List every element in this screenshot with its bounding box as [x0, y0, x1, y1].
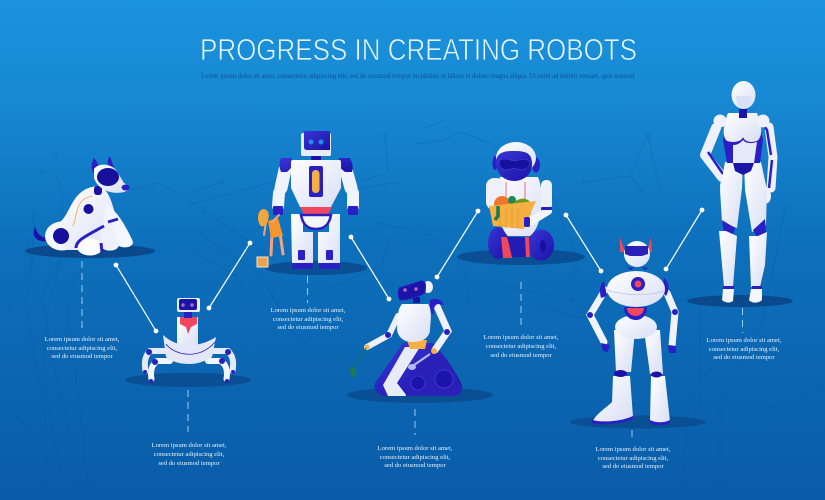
tank left arm [367, 316, 398, 347]
dashed line: android [742, 308, 744, 333]
dashed line: horned robot [631, 430, 633, 441]
caption: basket robot: consectetur adipiscing elit, [486, 343, 557, 350]
caption: horned robot: Lorem ipsum dolor sit amet, [596, 446, 671, 453]
subtitle: Lorem ipsum dolor sit amet, consectetur adipiscing elit, sed do eiusmod tempor incididunt ut labore et dolore magna aliqua. Ut enim ad minim veniam, quis nostrud [201, 72, 634, 80]
android head [732, 81, 756, 109]
circuit pattern [0, 120, 825, 500]
horned horns [620, 237, 652, 252]
horned head [624, 241, 650, 267]
basket robot red panels [501, 237, 530, 258]
caption: crab: sed do eiusmod tempor [158, 460, 220, 467]
basket robot shoulder left [486, 178, 504, 210]
crab shadow [125, 373, 251, 387]
basket robot dome [496, 142, 536, 174]
humanoid chest light [312, 170, 320, 193]
basket straps [506, 182, 525, 205]
crab legs [145, 351, 233, 379]
dashed line: dog [81, 261, 83, 331]
basket robot ears [532, 158, 540, 172]
android shoulders [714, 114, 726, 128]
caption: horned robot: sed do eiusmod tempor [602, 463, 664, 470]
connector: horned robot to android [664, 208, 704, 271]
crab red collar [180, 317, 197, 334]
horned left leg [614, 330, 635, 372]
tank eyes [403, 288, 407, 292]
tank torso [397, 304, 431, 342]
girl arm [264, 215, 279, 235]
caption: dog: sed do eiusmod tempor [51, 353, 113, 360]
dog shadow [25, 244, 155, 258]
title: PROGRESS IN CREATING ROBOTS [200, 32, 637, 67]
humanoid feet [292, 263, 313, 269]
caption: basket robot: sed do eiusmod tempor [490, 352, 552, 359]
basket robot skirt [500, 237, 530, 257]
tank hands [364, 344, 370, 350]
humanoid hands [273, 206, 283, 215]
toy box [257, 257, 268, 267]
crab visor [179, 299, 197, 310]
android feet [723, 286, 734, 289]
robot with basket [457, 142, 585, 265]
horned neck [627, 267, 648, 270]
caption: horned robot: consectetur adipiscing elit, [598, 455, 669, 462]
android right arm [769, 127, 773, 188]
robot horned [570, 237, 706, 428]
caption: humanoid: Lorem ipsum dolor sit amet, [271, 307, 346, 314]
crab column [177, 317, 198, 347]
tank spoon [414, 354, 430, 365]
humanoid face [304, 131, 330, 150]
caption: dog: consectetur adipiscing elit, [47, 345, 118, 352]
android left arm [705, 128, 722, 177]
basket robot wheels [488, 227, 508, 259]
android chest [723, 113, 763, 163]
tank wheels [411, 376, 425, 390]
robot tank [347, 281, 493, 403]
android left forearm stripe [708, 152, 723, 174]
dog collar wire [72, 196, 92, 226]
horned waist [624, 307, 647, 320]
horned arms [590, 290, 675, 346]
android neck [739, 109, 747, 118]
android bust [724, 113, 761, 142]
tank right arm [435, 304, 448, 350]
robot crab [125, 298, 251, 387]
caption: basket robot: Lorem ipsum dolor sit amet, [484, 334, 559, 341]
crab neck [184, 311, 192, 318]
tank neck [413, 297, 420, 303]
dog ears [92, 156, 114, 175]
girl legs [271, 233, 283, 255]
robot humanoid with girl [257, 131, 367, 275]
tank side panel [405, 352, 462, 396]
caption: tank: Lorem ipsum dolor sit amet, [378, 445, 453, 452]
android thighs [720, 162, 743, 228]
caption: tank: sed do eiusmod tempor [384, 462, 446, 469]
connector: basket robot to horned robot [564, 213, 603, 273]
green sock [495, 206, 498, 220]
connector: tank to basket robot [435, 209, 480, 279]
dog front leg [103, 205, 133, 247]
humanoid neck [311, 155, 321, 160]
basket robot forearm [530, 211, 548, 222]
tank shoulder [430, 299, 444, 315]
horned hands [601, 343, 676, 353]
horned pelvis [615, 315, 657, 339]
connector: crab to humanoid [207, 241, 252, 310]
humanoid head [301, 133, 331, 156]
tank white strip [383, 347, 420, 396]
android hips [733, 163, 754, 175]
horned shoulders [600, 278, 668, 298]
android calves [719, 231, 737, 287]
horned left boot [593, 376, 633, 422]
caption: android: consectetur adipiscing elit, [709, 346, 780, 353]
crab shell line [166, 342, 215, 354]
horned right boot [650, 376, 670, 424]
humanoid torso [291, 160, 341, 207]
humanoid legs [291, 214, 313, 263]
horned shadow [570, 416, 706, 428]
horned soles [592, 416, 670, 425]
basket robot cuff [541, 207, 552, 210]
humanoid shoulders [280, 158, 353, 172]
humanoid knees [298, 250, 305, 260]
basket robot visor [499, 159, 530, 170]
dog nose [122, 184, 130, 190]
caption: android: Lorem ipsum dolor sit amet, [707, 337, 782, 344]
dashed line: humanoid [306, 276, 308, 303]
caption: dog: Lorem ipsum dolor sit amet, [45, 336, 120, 343]
android midriff [733, 140, 757, 163]
dog head [94, 165, 128, 193]
horned elbows [587, 312, 593, 318]
horned torso seam [607, 290, 664, 295]
dog neck [94, 186, 102, 195]
android shadow [687, 295, 793, 307]
caption: crab: Lorem ipsum dolor sit amet, [152, 442, 227, 449]
girl hair [258, 209, 269, 226]
basket robot helmet [496, 151, 532, 181]
crab shell [163, 335, 216, 364]
dog tail [34, 228, 46, 241]
dog body [58, 187, 122, 250]
humanoid pelvis [301, 215, 331, 229]
dashed line: basket robot [520, 282, 522, 328]
horned right leg [644, 330, 663, 374]
dog visor [97, 168, 119, 186]
humanoid chest slot [309, 166, 323, 197]
robot dog [25, 156, 155, 258]
dog spots [84, 204, 94, 214]
dog rear foot [77, 238, 103, 256]
humanoid red belt [300, 207, 332, 214]
basket slats [500, 208, 518, 228]
humanoid shadow [265, 261, 367, 275]
crab eyes [181, 303, 185, 307]
tank ear [423, 281, 433, 293]
horned waist red [627, 308, 644, 316]
green tool [353, 348, 366, 368]
vegetables [494, 196, 510, 212]
android hands [720, 179, 730, 193]
crab joints [143, 349, 235, 383]
caption: crab: consectetur adipiscing elit, [154, 451, 225, 458]
connector: humanoid to tank [349, 235, 391, 301]
dashed line: tank [414, 409, 416, 435]
dog blue bands [76, 219, 118, 252]
basket robot torso [498, 177, 542, 236]
crab head [177, 298, 200, 312]
tank head [398, 281, 426, 300]
android knees [722, 219, 766, 237]
dashed line: crab [187, 390, 189, 432]
basket [489, 201, 536, 229]
humanoid arms [278, 170, 353, 206]
horned knees [614, 370, 627, 377]
tank tread [375, 343, 462, 396]
tank joints [385, 332, 391, 338]
basket robot arm right [541, 180, 552, 210]
basket robot right wheel hub [540, 240, 546, 252]
tank shadow [347, 387, 493, 403]
caption: tank: consectetur adipiscing elit, [380, 454, 451, 461]
caption: humanoid: sed do eiusmod tempor [277, 324, 339, 331]
caption: android: sed do eiusmod tempor [713, 354, 775, 361]
tank waist [407, 340, 427, 349]
android face [736, 96, 751, 108]
dog middle leg [100, 222, 119, 251]
connector: dog to crab [114, 263, 158, 333]
basket robot shadow [457, 249, 585, 265]
basket robot hand [524, 217, 530, 227]
dog haunch [45, 222, 79, 250]
caption: humanoid: consectetur adipiscing elit, [273, 316, 344, 323]
girl dress [268, 218, 283, 238]
humanoid eyes [308, 140, 314, 144]
horned torso [607, 271, 665, 307]
girl [257, 209, 283, 267]
android right arm stripe [758, 118, 772, 188]
robot android [687, 81, 793, 307]
horned chest core [631, 277, 645, 291]
horned visor [625, 246, 648, 256]
